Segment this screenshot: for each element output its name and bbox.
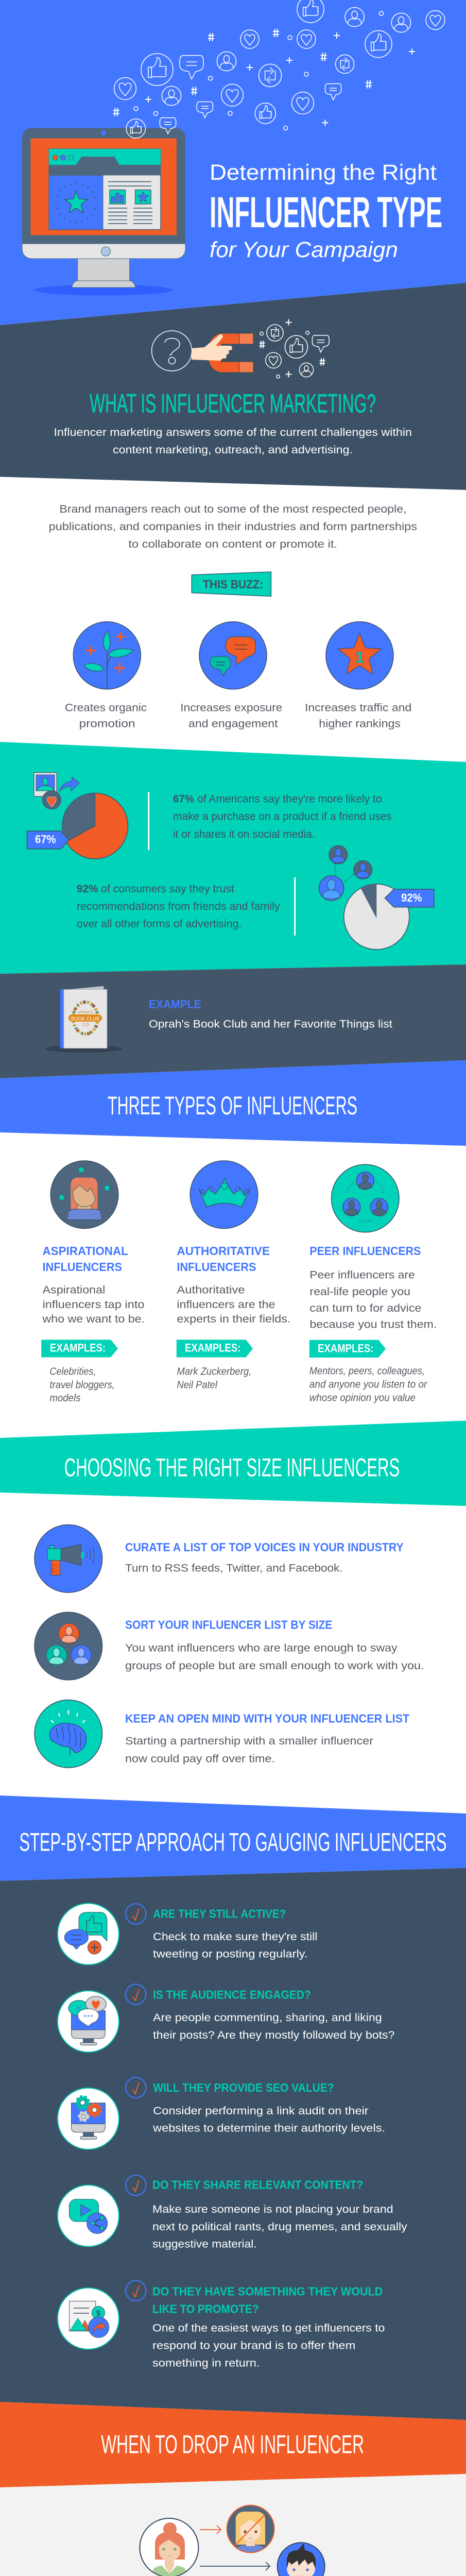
heading: for your campaign: for Your Campaign: [210, 238, 398, 262]
text block: 67 percent stat: it or shares it on social media.: [173, 828, 315, 840]
text block: influencer marketing definition: Influencer marketing answers some of the current challenges within: [54, 427, 412, 438]
icon: social activity bubbles: [58, 1903, 119, 1965]
text block: curate a list: CURATE A LIST OF TOP VOICES IN YOUR INDUSTRY: [125, 1540, 404, 1554]
column: peer influencers: Mentors, peers, colleagues,: [309, 1366, 425, 1377]
illustration: influencer swap: [140, 2505, 325, 2576]
icon: promotional document: $: [96, 2309, 101, 2317]
icon: authoritative crown: [190, 1161, 258, 1229]
icon: seo gears monitor: [58, 2088, 119, 2149]
column: aspirational influencers: who we want to be.: [42, 1313, 145, 1325]
text block: brand managers: Brand managers reach out to some of the most respected people,: [59, 503, 407, 515]
text block: brand managers: to collaborate on content or promote it.: [128, 538, 337, 550]
column: aspirational influencers: [41, 1244, 145, 1404]
chart: 67 percent pie with share icon: 67%: [35, 833, 56, 845]
captions: buzz benefits: promotion: [79, 718, 135, 730]
column: authoritative influencers: [177, 1244, 290, 1391]
column: authoritative influencers: AUTHORITATIVE: [177, 1244, 270, 1258]
text block: influencer marketing definition: [54, 427, 412, 456]
text block: brand managers: [49, 503, 417, 550]
item: will they provide seo value: WILL THEY PROVIDE SEO VALUE?: [153, 2081, 334, 2094]
column: peer influencers: real-life people you: [309, 1286, 410, 1298]
icon: like and comment leaving monitor: [126, 118, 176, 138]
captions: buzz benefits: Increases exposure: [180, 702, 282, 714]
text block: 67 percent stat: make a purchase on a product if a friend uses: [173, 811, 392, 822]
panel: step by step heading band: [0, 1795, 466, 1881]
item: something to promote: LIKE TO PROMOTE?: [152, 2302, 259, 2315]
captions: buzz benefits: Increases traffic and: [305, 702, 411, 714]
column: authoritative influencers: Authoritative: [177, 1284, 245, 1296]
item: something to promote: [126, 2280, 385, 2369]
panel: hero background: [0, 0, 466, 325]
heading: determining the right: Determining the Right: [210, 160, 437, 185]
chart: 92 percent pie with people: [319, 845, 434, 950]
avatar: dropped blonde influencer: [227, 2505, 274, 2553]
item: something to promote: respond to your brand is to offer them: [152, 2340, 355, 2351]
item: are they still active: ARE THEY STILL ACTIVE?: [153, 1907, 286, 1921]
icon: oprah book: [45, 986, 122, 1053]
arrow: to new influencer: [200, 2562, 270, 2570]
item: something to promote: something in return.: [152, 2358, 260, 2369]
icon: shared video content: [58, 2185, 119, 2246]
icon: promotional document: [58, 2288, 119, 2349]
icon: engaged audience monitor: #: [76, 2005, 81, 2013]
column: peer influencers: Peer influencers are: [309, 1269, 415, 1281]
text block: sort your influencer list: [125, 1618, 424, 1672]
column: aspirational influencers: influencers tap into: [42, 1299, 144, 1311]
panel: right size heading band: [0, 1421, 466, 1506]
column: aspirational influencers: ASPIRATIONAL: [42, 1244, 128, 1258]
panel: example background: [0, 964, 466, 1078]
icon: oprah book: BOOK CLUB: [71, 1016, 99, 1022]
panel: gauging influencers background: [0, 1868, 466, 2420]
icon cloud: social icons near magnet: [260, 319, 329, 378]
text block: 67 percent stat: of Americans say they're more likely to: [197, 793, 382, 805]
text block: sort your influencer list: SORT YOUR INFLUENCER LIST BY SIZE: [125, 1618, 332, 1631]
text block: example: Oprah's Book Club and her Favorite Things list: [149, 1019, 392, 1030]
icon: oprah book: OPRAH'S: [78, 1011, 93, 1014]
icon: organic plant: [73, 622, 141, 689]
column: peer influencers: PEER INFLUENCERS: [309, 1244, 421, 1258]
item: something to promote: DO THEY HAVE SOMETHING THEY WOULD: [152, 2285, 383, 2298]
captions: buzz benefits: higher rankings: [319, 718, 401, 730]
column: peer influencers: EXAMPLES:: [318, 1342, 374, 1355]
icon: engaged audience monitor: [58, 1991, 119, 2052]
captions: buzz benefits: and engagement: [188, 718, 278, 730]
column: peer influencers: because you trust them.: [309, 1318, 437, 1330]
text block: keep an open mind: Starting a partnership with a smaller influencer: [125, 1735, 373, 1747]
arrow: to dropped influencer: [200, 2526, 221, 2534]
item: something to promote: One of the easiest ways to get influencers to: [152, 2323, 385, 2334]
text block: 67 percent stat: 67%: [173, 793, 194, 805]
text block: 67 percent stat: [173, 793, 392, 840]
text block: keep an open mind: now could pay off over time.: [125, 1753, 275, 1765]
column: aspirational influencers: INFLUENCERS: [42, 1260, 122, 1274]
avatar: boy with dark hair: [278, 2543, 325, 2576]
text block: curate a list: Turn to RSS feeds, Twitter, and Facebook.: [125, 1563, 343, 1574]
icon: oprah book: 2.0: [82, 1022, 89, 1027]
item: are they still active: Check to make sure they're still: [153, 1931, 317, 1943]
captions: buzz benefits: [65, 702, 411, 730]
text block: keep an open mind: [125, 1712, 409, 1765]
icon: speech bubbles: [199, 622, 267, 689]
chart: 67 percent pie with share icon: [27, 773, 128, 859]
item: do they share relevant content: Make sure someone is not placing your brand: [152, 2204, 393, 2215]
text block: sort your influencer list: groups of people but are small enough to work with you.: [125, 1660, 424, 1672]
column: peer influencers: whose opinion you value: [309, 1392, 416, 1403]
text block: 92 percent stat: 92%: [77, 883, 98, 895]
divider: 67 percent stat: [148, 792, 149, 850]
column: aspirational influencers: travel bloggers,: [49, 1380, 115, 1391]
icon: star number one: [326, 622, 393, 689]
column: aspirational influencers: Aspirational: [42, 1284, 105, 1296]
column: aspirational influencers: EXAMPLES:: [50, 1342, 106, 1354]
icon: megaphone: [34, 1525, 102, 1592]
column: peer influencers: [309, 1244, 437, 1403]
icon: question mark circle: [152, 331, 192, 371]
item: is the audience engaged: IS THE AUDIENCE ENGAGED?: [153, 1988, 311, 2002]
item: do they share relevant content: next to political rants, drug memes, and sexually: [152, 2221, 407, 2233]
text block: sort your influencer list: You want influencers who are large enough to sway: [125, 1642, 398, 1654]
divider: 92 percent stat: [294, 877, 296, 936]
icon: peer influencers: [332, 1164, 399, 1232]
text block: 92 percent stat: [77, 883, 280, 930]
label: this buzz: THIS BUZZ:: [203, 578, 263, 591]
chart: 92 percent pie with people: 92%: [401, 891, 422, 904]
text block: example: [149, 997, 392, 1030]
text block: brand managers: publications, and companies in their industries and form partnerships: [49, 521, 417, 533]
item: do they share relevant content: suggestive material.: [152, 2239, 257, 2250]
item: is the audience engaged: [126, 1984, 395, 2041]
column: authoritative influencers: INFLUENCERS: [177, 1260, 256, 1274]
panel: three types heading band: [0, 1060, 466, 1146]
text block: 92 percent stat: of consumers say they trust: [101, 883, 234, 895]
item: is the audience engaged: Are people commenting, sharing, and liking: [153, 2012, 382, 2024]
column: authoritative influencers: influencers are the: [177, 1299, 275, 1311]
text block: 92 percent stat: recommendations from friends and family: [77, 901, 280, 912]
text block: 92 percent stat: over all other forms of advertising.: [77, 918, 241, 930]
column: authoritative influencers: experts in their fields.: [177, 1313, 290, 1325]
icon: open mind brain: [34, 1700, 102, 1768]
column: peer influencers: and anyone you listen to or: [309, 1379, 428, 1390]
panel: when to drop heading band: [0, 2402, 466, 2487]
item: do they share relevant content: [126, 2175, 407, 2250]
column: authoritative influencers: Neil Patel: [177, 1380, 217, 1391]
column: aspirational influencers: Celebrities,: [49, 1366, 96, 1378]
avatar: woman with red hair: [140, 2518, 198, 2576]
icon: desktop monitor with web page: [22, 128, 185, 296]
column: authoritative influencers: Mark Zuckerberg,: [177, 1366, 251, 1378]
item: will they provide seo value: [126, 2077, 385, 2134]
item: will they provide seo value: Consider performing a link audit on their: [153, 2105, 369, 2117]
icon: aspirational influencer: [50, 1161, 118, 1229]
icon: star number one: 1: [355, 648, 364, 666]
captions: buzz benefits: Creates organic: [65, 702, 147, 714]
panel: what is influencer marketing background: [0, 283, 466, 490]
label: this buzz: [192, 572, 271, 596]
column: aspirational influencers: models: [49, 1393, 80, 1404]
panel: when to drop background: [0, 2474, 466, 2576]
panel: statistics background: [0, 742, 466, 974]
icon: sorted influencers: [34, 1612, 102, 1680]
column: peer influencers: can turn to for advice: [309, 1302, 421, 1314]
item: will they provide seo value: websites to determine their authority levels.: [152, 2123, 385, 2134]
icon: magnet held by hand: [192, 333, 253, 372]
text block: influencer marketing definition: content marketing, outreach, and advertising.: [113, 444, 353, 456]
text block: example: EXAMPLE: [149, 997, 201, 1011]
column: authoritative influencers: EXAMPLES:: [185, 1342, 241, 1354]
item: are they still active: tweeting or posting regularly.: [153, 1948, 307, 1960]
text block: curate a list: [125, 1540, 404, 1574]
item: do they share relevant content: DO THEY SHARE RELEVANT CONTENT?: [152, 2178, 363, 2192]
icon cloud: social icons rising from monitor: [113, 0, 445, 130]
text block: keep an open mind: KEEP AN OPEN MIND WITH YOUR INFLUENCER LIST: [125, 1712, 409, 1725]
item: are they still active: [126, 1904, 317, 1960]
item: is the audience engaged: their posts? Are they mostly followed by bots?: [153, 2029, 394, 2041]
